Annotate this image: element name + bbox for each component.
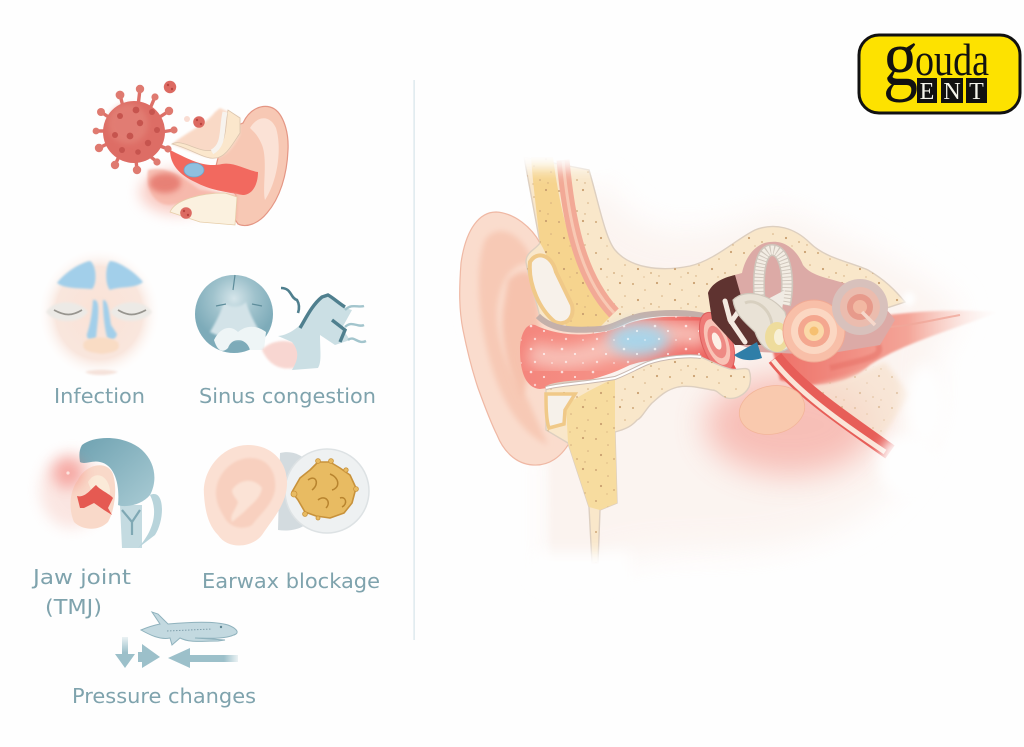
- small virus particles: [164, 81, 205, 219]
- icon: airplane: [141, 612, 237, 645]
- pinna: [460, 212, 600, 465]
- frontal sinuses: [57, 261, 143, 290]
- lower temporal bone: [546, 356, 751, 563]
- heading label: Jaw joint (TMJ): (TMJ): [45, 595, 102, 619]
- red vessel strip: [563, 160, 614, 313]
- cartilage piece: [530, 255, 573, 323]
- yellow marrow band: [531, 157, 612, 327]
- hand with motion waves: [278, 288, 366, 370]
- soft fade edges: [505, 135, 945, 592]
- teal dome: [79, 438, 154, 506]
- heading label: Jaw joint (TMJ): Jaw joint: [31, 565, 131, 589]
- teal head circle: [195, 275, 273, 353]
- soft head shading: [480, 180, 960, 570]
- fatty lobe: [735, 380, 809, 440]
- logo: Gouda ENT: g: [883, 12, 918, 103]
- ENT letters: T: [969, 79, 984, 105]
- pale stem: [120, 505, 142, 548]
- icon: sinus face: [37, 247, 161, 379]
- nasal passages: [87, 300, 117, 340]
- pinna: [204, 445, 287, 546]
- cochlea small: [832, 279, 888, 335]
- ENT letters: N: [943, 79, 961, 105]
- ENT letters: E: [920, 79, 934, 105]
- right flesh and nerves: [770, 311, 1000, 440]
- divider line: [414, 80, 415, 640]
- ENT letters: [917, 78, 987, 105]
- semicircular canal: [759, 250, 787, 310]
- ear: [71, 465, 115, 529]
- icon: jaw joint: [40, 438, 162, 548]
- icon: earwax blockage: [204, 445, 369, 546]
- tube: [773, 358, 890, 452]
- icon: virus attacking ear: [93, 81, 288, 226]
- main illustration: ear anatomy: [460, 135, 1000, 592]
- heading label: Pressure changes: Pressure changes: [72, 684, 256, 708]
- heading label: Earwax blockage: Earwax blockage: [202, 569, 380, 593]
- cartilage piece lower: [546, 394, 575, 428]
- logo: Gouda ENT: ouda: [915, 34, 989, 85]
- ossicles: [725, 301, 745, 342]
- grey shadow: [278, 452, 310, 531]
- ear canal: [520, 316, 738, 389]
- wax blob: [291, 459, 358, 520]
- yellow marrow band lower: [566, 378, 617, 510]
- red glow: [53, 458, 83, 488]
- ear cross-section: [140, 106, 288, 226]
- heading label: Infection: Infection: [54, 384, 145, 408]
- arrows: pressure direction: [115, 637, 238, 668]
- upper temporal bone: [524, 157, 905, 345]
- cochlea large: [783, 300, 845, 362]
- vestibule: [733, 294, 793, 352]
- blue middle ear fluid: [734, 342, 762, 360]
- lens circle: [285, 449, 369, 533]
- logo: Gouda ENT: [859, 12, 1020, 113]
- heading label: Jaw joint (TMJ): [31, 565, 131, 619]
- virus particle: [93, 85, 178, 174]
- inner ear cavity: [708, 242, 895, 355]
- icon: sinus congestion: [195, 275, 366, 370]
- pink hand shadow: [262, 341, 305, 369]
- red joint: [77, 485, 113, 515]
- eardrum: [692, 308, 742, 376]
- canal wall stripe: [538, 313, 708, 330]
- heading label: Sinus congestion: Sinus congestion: [199, 384, 376, 408]
